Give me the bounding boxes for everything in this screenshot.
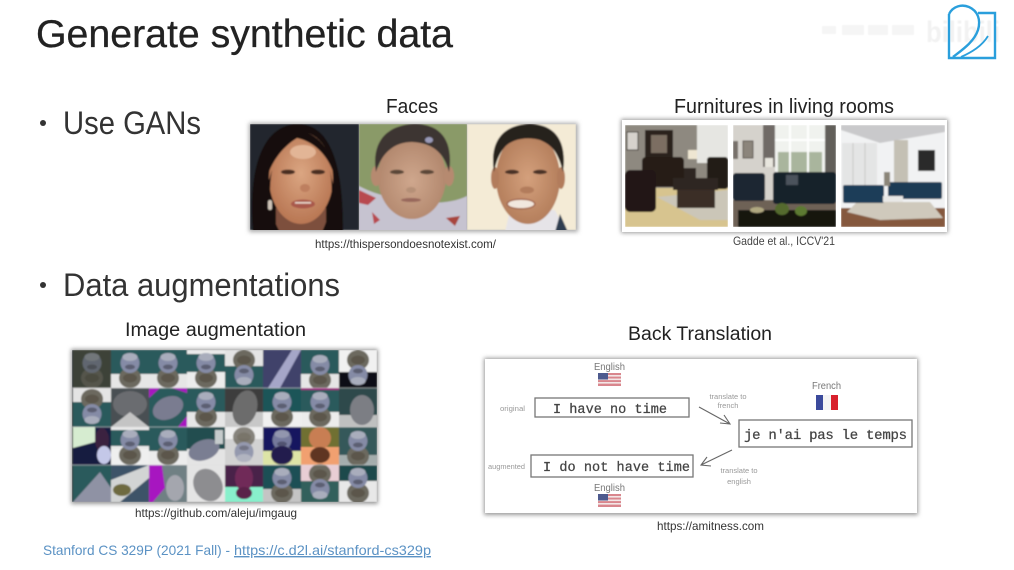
face: woman [250, 124, 359, 232]
diagram frame with shadow [484, 358, 918, 515]
icon: French flag [816, 395, 838, 410]
label: translate to french [709, 392, 747, 410]
label: translate to french: translate to [709, 392, 747, 401]
arrow: to french [699, 407, 730, 424]
label: translate to english [720, 466, 758, 486]
arrow: to english [701, 450, 732, 466]
bullet: Data augmentations: Data augmentations [63, 267, 340, 303]
watermark: faint channel text [822, 25, 914, 35]
panel: back translation [484, 324, 918, 533]
label: translate to english: english [727, 477, 751, 486]
room: white room with blue sofas [841, 125, 945, 227]
icon: blue corner logo [949, 6, 995, 58]
icon: US flag bottom [598, 494, 621, 507]
box: I do not have time: I do not have time [543, 461, 690, 476]
label: augmented: augmented [488, 462, 525, 471]
box: je n'ai pas le temps: je n'ai pas le temps [744, 428, 907, 444]
heading: Faces: Faces [386, 96, 438, 118]
heading: Back Translation: Back Translation [628, 324, 772, 345]
room: navy sofa with window [733, 125, 836, 227]
bullet: Use GANs: Use GANs [63, 105, 201, 141]
title: Generate synthetic data [36, 13, 453, 56]
label: original: original [500, 404, 525, 413]
panel: faces [249, 96, 578, 251]
box: I have no time: I have no time [553, 403, 667, 418]
room: brown leather sofa [625, 125, 728, 227]
label: English top: English [594, 362, 625, 373]
face: man [467, 124, 576, 232]
augmented quokka grid [72, 350, 377, 507]
image shadow [249, 123, 578, 232]
footer: course credit: Stanford CS 329P (2021 Fall) - [43, 542, 230, 558]
box: I have no time [535, 398, 689, 418]
source: amitness: https://amitness.com [657, 519, 764, 533]
label: translate to english: translate to [720, 466, 758, 475]
heading: Furnitures in living rooms: Furnitures in living rooms [674, 96, 894, 118]
icon: US flag top [598, 373, 621, 386]
image frame with shadow [621, 119, 948, 233]
label: English bottom: English [594, 483, 625, 494]
footer: course credit [43, 542, 431, 558]
box: I do not have time [531, 455, 693, 477]
face: child [359, 124, 467, 232]
panel: furniture [621, 96, 948, 248]
panel: image augmentation [71, 320, 378, 520]
heading: Image augmentation: Image augmentation [125, 320, 306, 341]
box: je n'ai pas le temps [739, 420, 912, 447]
footer: course credit: https://c.d2l.ai/stanford-cs329p [234, 542, 431, 558]
source: thispersondoesnotexist: https://thispersondoesnotexist.com/ [315, 237, 497, 251]
label: French: French [812, 381, 841, 392]
label: translate to french: french [718, 401, 738, 410]
source: imgaug: https://github.com/aleju/imgaug [135, 506, 297, 520]
source: Gadde et al.: Gadde et al., ICCV'21 [733, 234, 835, 248]
image shadow [71, 349, 378, 504]
watermark: bilibili logo ghost: bilibili [926, 16, 1000, 49]
